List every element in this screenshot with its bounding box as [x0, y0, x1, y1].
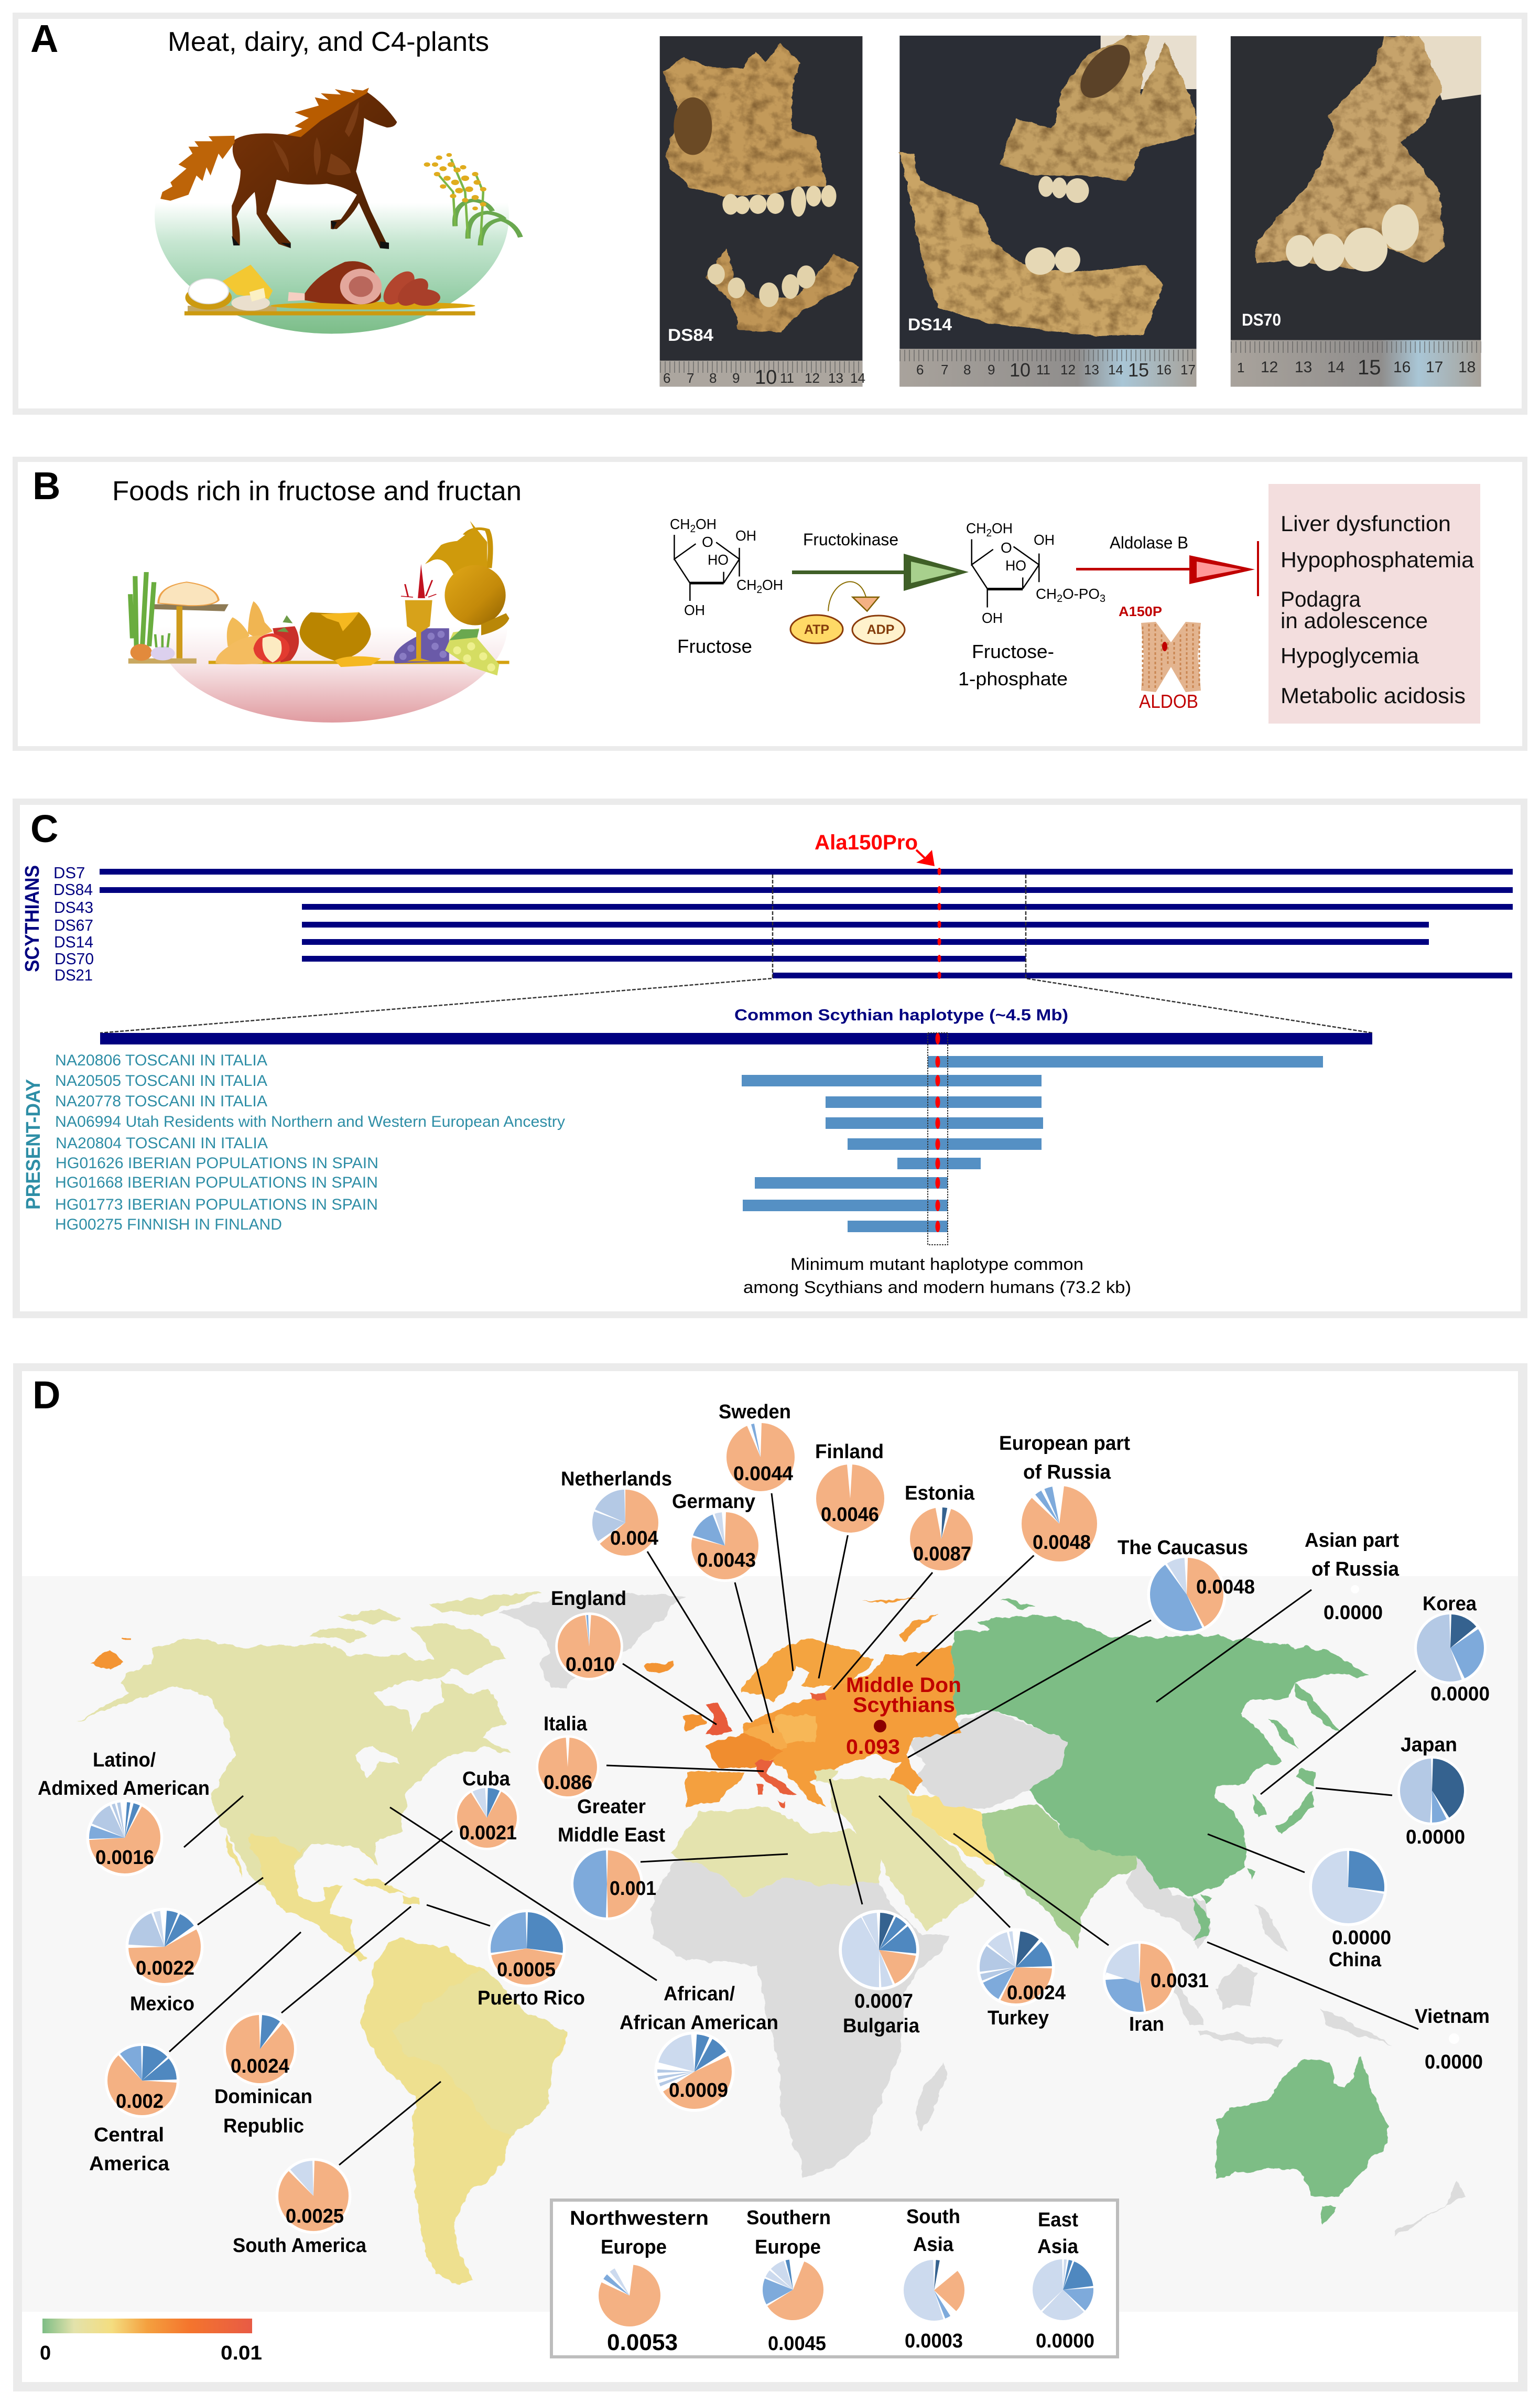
fructokinase arrow with ATP/ADP: Fructokinase — [803, 530, 898, 549]
Scythian sample labels: DS43 — [54, 898, 93, 917]
colour scale: 0 — [40, 2342, 51, 2364]
fructose-1-phosphate structure — [958, 520, 1105, 689]
ruler numbers: 10 — [755, 367, 777, 389]
region: Germany — [774, 1715, 816, 1743]
Scythian sample labels — [53, 864, 94, 984]
pie: Turkey: Turkey — [988, 2007, 1049, 2029]
pie: Mexico: 0.0022 — [136, 1957, 194, 1979]
region: Iran — [906, 1795, 997, 1866]
fructose-1-phosphate structure: CH — [966, 520, 987, 536]
wooden board under dairy — [188, 306, 277, 313]
panel letter C: C — [30, 807, 58, 850]
ruler numbers: 6 — [916, 362, 924, 378]
side label: Scythians: SCYTHIANS — [21, 865, 44, 972]
icon: bread on stand — [155, 582, 229, 659]
fructokinase arrow with ATP/ADP: ATP — [804, 622, 829, 637]
illustration: green bowl with horse and food — [155, 88, 520, 333]
pie: The Caucasus: 0.0048 — [1196, 1576, 1255, 1598]
present-day haplotype bars — [742, 1056, 1323, 1232]
panel C: haplotype chart — [13, 799, 1527, 1318]
region: Iceland — [645, 1661, 675, 1673]
fructose-1-phosphate structure: OH — [982, 610, 1003, 626]
gold shelf line — [209, 661, 509, 664]
region: Alpine Europe — [744, 1721, 787, 1751]
pie: African / African American — [620, 1983, 778, 2112]
pie: China: 0.0000 — [1332, 1927, 1391, 1949]
icon: cheese — [223, 265, 273, 311]
pie: East Asia: 0.0000 — [1036, 2330, 1094, 2352]
fructose-1-phosphate structure: 1-phosphate — [958, 668, 1068, 689]
pie: East Asia: East — [1038, 2209, 1078, 2231]
pie: Vietnam: Vietnam — [1415, 2006, 1490, 2028]
icon: millet plants — [424, 153, 520, 245]
aldolase B blocked arrow: Aldolase B — [1110, 533, 1188, 552]
fructose structure: 2 — [756, 584, 762, 596]
ruler numbers: 15 — [1358, 356, 1381, 379]
ruler numbers: 12 — [805, 370, 820, 386]
present-day sample labels: HG00275 FINNISH IN FINLAND — [55, 1216, 282, 1233]
side label: present-day: PRESENT-DAY — [23, 1079, 45, 1210]
region: Brazil — [393, 1969, 567, 2136]
pie: South America — [233, 2158, 367, 2257]
pie: African / African American: African/ — [664, 1983, 735, 2005]
pie: Greater Middle East — [558, 1796, 665, 1920]
present-day sample labels: NA20804 TOSCANI IN ITALIA — [56, 1135, 268, 1152]
pie: Japan — [1397, 1734, 1467, 1848]
fructose structure: CH — [670, 516, 691, 532]
ruler numbers: 17 — [1180, 362, 1196, 378]
icon: gold jug — [425, 521, 509, 635]
region: Mexico and Central America — [248, 1835, 377, 1961]
pie: African / African American: African American — [620, 2012, 778, 2034]
heading: foods rich in fructose and fructan: Foods rich in fructose and fructan — [112, 476, 522, 507]
heading: meat, dairy, C4 plants: Meat, dairy, and C4-plants — [168, 27, 489, 57]
region: southern USA — [276, 1835, 377, 1866]
ruler numbers: 15 — [1128, 359, 1149, 381]
photos of jaws — [660, 36, 1481, 389]
icon: horse — [160, 88, 397, 249]
ruler numbers: 13 — [828, 370, 843, 386]
Scythian site label: 0.093 — [846, 1736, 900, 1759]
ruler numbers: 16 — [1156, 362, 1172, 378]
fructose-1-phosphate structure: Fructose- — [972, 641, 1054, 662]
pie: Turkey: 0.0024 — [1007, 1982, 1066, 2004]
pie: Korea — [1414, 1593, 1490, 1705]
region: France — [706, 1733, 783, 1768]
photo: DS14 maxilla and mandible — [899, 36, 1197, 386]
photo labels: DS14 — [908, 315, 952, 334]
minimum haplotype caption: Minimum mutant haplotype common — [790, 1255, 1083, 1274]
mutation markers on Scythian bars — [937, 868, 941, 979]
pie: Bulgaria: Bulgaria — [843, 2015, 920, 2037]
region: Arctic islands — [309, 1592, 542, 1674]
icon: pears and apple — [215, 601, 299, 664]
ruler numbers: 12 — [1261, 359, 1278, 376]
region: Novaya Zemlya and Svalbard — [861, 1599, 939, 1643]
pie: Mexico: Mexico — [130, 1993, 194, 2015]
symptoms box — [1268, 484, 1480, 724]
minimum haplotype caption: among Scythians and modern humans (73.2 kb) — [743, 1278, 1131, 1297]
region: Pacific orange landmass — [90, 1637, 129, 1669]
minimum haplotype dotted box — [928, 1033, 948, 1245]
region: North America — [75, 1639, 512, 1888]
aldolase B blocked arrow — [1076, 533, 1259, 596]
fructose-1-phosphate structure: 3 — [1100, 593, 1105, 605]
colour scale: 0.01 — [221, 2342, 262, 2364]
ruler numbers: 9 — [988, 362, 995, 378]
pie: Estonia — [905, 1482, 975, 1573]
region: Ireland — [685, 1713, 706, 1730]
pie: Southern Europe: Southern — [746, 2207, 831, 2229]
Scythian sample labels: DS70 — [55, 950, 94, 968]
icon: grapes — [394, 628, 499, 675]
fructose structure: Fructose — [677, 635, 752, 657]
ruler tick marks — [660, 347, 1481, 367]
region: Greenland — [499, 1594, 687, 1689]
present-day sample labels: NA06994 Utah Residents with Northern and Western European Ancestry — [55, 1113, 565, 1130]
pie: Northwestern Europe — [570, 2207, 709, 2355]
pie: Netherlands: 0.004 — [610, 1527, 658, 1549]
pie: Iran: 0.0031 — [1151, 1970, 1209, 1992]
pie: Greater Middle East: 0.001 — [610, 1878, 656, 1900]
pie: East Asia: Asia — [1037, 2236, 1079, 2258]
fructose structure: OH — [684, 602, 705, 618]
region: Africa — [650, 1854, 952, 2179]
region: China lower — [1029, 1791, 1246, 1898]
region: Bulgaria — [816, 1770, 838, 1783]
photo labels — [668, 310, 1281, 344]
pie: Turkey — [977, 1928, 1066, 2029]
ruler numbers: 13 — [1084, 362, 1099, 378]
pie: Japan: 0.0000 — [1406, 1826, 1465, 1848]
fructose structure: OH — [762, 577, 783, 593]
pie: Netherlands: Netherlands — [561, 1468, 672, 1490]
Scythian sample labels: DS7 — [53, 864, 85, 882]
fructose structure: 2 — [690, 523, 696, 535]
photo: DS70 maxilla — [1231, 36, 1481, 386]
region: South America — [361, 1936, 567, 2285]
fructose structure: OH — [735, 527, 756, 544]
ruler numbers: 11 — [1036, 362, 1050, 378]
dashed zoom guides — [100, 875, 1372, 1033]
ruler numbers: 17 — [1426, 359, 1443, 376]
region: Tasmania — [1320, 2204, 1337, 2224]
fructose structure — [670, 516, 783, 657]
region: Iberia — [686, 1771, 744, 1806]
symptoms box: Podagra — [1281, 587, 1361, 611]
Scythian site label: Scythians — [853, 1694, 955, 1717]
ruler numbers: 14 — [1327, 359, 1344, 376]
pie: African / African American: 0.0009 — [669, 2079, 728, 2102]
pie: South Asia — [905, 2206, 963, 2352]
pie: Bulgaria: 0.0007 — [854, 1990, 913, 2012]
pie: Dominican Republic: Republic — [223, 2115, 304, 2137]
pie: Japan: Japan — [1401, 1734, 1457, 1756]
ruler numbers — [663, 356, 1476, 389]
ruler numbers: 6 — [663, 370, 670, 386]
pie: Central America: Central — [94, 2124, 164, 2146]
panel letter D: D — [32, 1373, 60, 1417]
common haplotype label: Common Scythian haplotype (~4.5 Mb) — [734, 1006, 1068, 1024]
icon: honey pot — [299, 612, 381, 667]
pie: China — [1309, 1848, 1391, 1971]
panel D: world map of allele frequency — [13, 1363, 1527, 2391]
Scythian haplotype bars — [100, 869, 1513, 978]
present-day sample labels: HG01626 IBERIAN POPULATIONS IN SPAIN — [56, 1155, 378, 1172]
ruler numbers: 18 — [1458, 359, 1476, 376]
pie: Korea: 0.0000 — [1430, 1683, 1490, 1705]
present-day sample labels: NA20806 TOSCANI IN ITALIA — [55, 1052, 267, 1069]
mutation markers on present-day bars — [935, 1033, 940, 1232]
pie: Southern Europe — [746, 2207, 831, 2355]
pie: Asian part of Russia: 0.0000 — [1324, 1602, 1383, 1624]
pie: Iran — [1103, 1941, 1209, 2035]
pie: European part of Russia — [999, 1432, 1130, 1565]
ruler numbers: 9 — [732, 370, 740, 386]
region: European Russia and Eastern Europe — [744, 1646, 961, 1805]
icon: goblet with wine — [401, 564, 436, 661]
region: Italy — [754, 1758, 796, 1806]
fructose structure: OH — [696, 516, 717, 532]
pie: Latino / Admixed American — [38, 1749, 210, 1876]
pie: Finland: 0.0046 — [821, 1504, 879, 1526]
A150P label: A150P — [1119, 604, 1162, 619]
arrow: to mutation — [916, 850, 935, 866]
panel letter A: A — [30, 17, 58, 60]
symptoms box: Liver dysfunction — [1281, 511, 1451, 536]
panel B: fructose pathway — [13, 457, 1527, 751]
pie: Finland: Finland — [815, 1441, 884, 1463]
ruler numbers: 14 — [1108, 362, 1123, 378]
ruler numbers: 12 — [1060, 362, 1076, 378]
pie: Italia: Italia — [544, 1713, 588, 1735]
present-day sample labels — [55, 1052, 565, 1233]
Scythian site label — [846, 1674, 961, 1759]
pie: Southern Europe: Europe — [755, 2236, 821, 2258]
ruler numbers: 7 — [941, 362, 948, 378]
minimum haplotype caption — [743, 1255, 1131, 1297]
pie: England: England — [551, 1588, 626, 1610]
pie: Estonia: Estonia — [905, 1482, 975, 1504]
pie: South Asia: 0.0003 — [905, 2330, 963, 2352]
pie: Southern Europe: 0.0045 — [768, 2333, 826, 2355]
pie: England: 0.010 — [566, 1654, 615, 1676]
fructose-1-phosphate structure: HO — [1005, 557, 1026, 574]
icon: bowl of cottage cheese — [185, 278, 232, 309]
Scythian sample labels: DS21 — [55, 966, 93, 984]
region: Scandinavia — [743, 1639, 874, 1701]
ruler numbers: 16 — [1393, 359, 1411, 376]
ruler numbers: 11 — [780, 370, 794, 386]
world map — [75, 1592, 1467, 2285]
symptoms box: in adolescence — [1281, 608, 1428, 633]
pie: Finland — [814, 1441, 887, 1535]
region: Asia north — [952, 1614, 1370, 1888]
pie: China: China — [1329, 1949, 1382, 1971]
symptoms box: Hypoglycemia — [1281, 643, 1419, 668]
panel A: diet and skeletal remains — [13, 13, 1527, 415]
ruler numbers: 1 — [1237, 360, 1244, 375]
pie: Greater Middle East: Middle East — [558, 1824, 665, 1846]
fructose-1-phosphate structure: 2 — [986, 527, 992, 539]
panel letter B: B — [32, 464, 60, 508]
fructokinase arrow with ATP/ADP: ADP — [867, 622, 894, 637]
leader lines — [169, 1493, 1418, 2165]
pie: East Asia — [1036, 2209, 1094, 2352]
pie: Mexico — [125, 1908, 204, 2015]
fructose structure: O — [702, 534, 713, 550]
pie: Asian part of Russia — [1305, 1529, 1400, 1624]
icon: ham and slices on plate — [270, 261, 475, 309]
photo: DS84 maxilla and mandible — [660, 36, 862, 386]
ruler numbers: 13 — [1295, 359, 1312, 376]
sea: Great Lakes — [356, 1744, 399, 1780]
ALDOB label: ALDOB — [1139, 691, 1198, 712]
present-day sample labels: HG01668 IBERIAN POPULATIONS IN SPAIN — [55, 1174, 378, 1191]
pie: The Caucasus — [1118, 1537, 1255, 1634]
pie: South Asia: Asia — [913, 2234, 954, 2256]
pie: Latino / Admixed American: Admixed American — [38, 1777, 210, 1799]
Scythian site label: Middle Don — [846, 1674, 961, 1697]
pie: Vietnam — [1415, 2006, 1490, 2073]
pie: Latino / Admixed American: 0.0016 — [95, 1847, 154, 1869]
pie: Cuba — [454, 1768, 519, 1850]
Ala150Pro label: Ala150Pro — [815, 831, 918, 854]
region: Central Asia — [906, 1711, 1067, 1808]
photo labels: DS70 — [1242, 310, 1281, 329]
region: Estonia — [809, 1693, 826, 1699]
region: Turkey, Arabia and Middle East — [829, 1777, 984, 1931]
pie: Central America: 0.002 — [116, 2090, 164, 2113]
region: Caribbean islands — [353, 1878, 420, 1904]
pie: Puerto Rico: Puerto Rico — [478, 1987, 585, 2009]
pie: The Caucasus: The Caucasus — [1118, 1537, 1248, 1559]
region: Madagascar — [914, 2062, 947, 2131]
pie: Dominican Republic: 0.0024 — [231, 2055, 289, 2077]
region: Baja California — [225, 1837, 243, 1877]
fructokinase arrow with ATP/ADP — [790, 530, 969, 644]
fructose-1-phosphate structure: OH — [1034, 532, 1055, 548]
pie: Puerto Rico: 0.0005 — [497, 1959, 556, 1981]
fructose-1-phosphate structure: CH — [1036, 586, 1057, 602]
fructose-1-phosphate structure: O-PO — [1062, 586, 1100, 602]
pie: Northwestern Europe: Northwestern — [570, 2207, 709, 2229]
pie: Sweden — [719, 1401, 797, 1494]
pie: Korea: Korea — [1423, 1593, 1477, 1615]
region: Great Britain — [706, 1701, 732, 1736]
pie: European part of Russia: 0.0048 — [1033, 1532, 1091, 1554]
pie: Bulgaria — [839, 1910, 920, 2037]
pie: Germany: 0.0043 — [697, 1549, 756, 1571]
photo labels: DS84 — [668, 326, 713, 344]
pie: Estonia: 0.0087 — [913, 1543, 971, 1565]
pie: Dominican Republic — [214, 2012, 312, 2137]
pie: Latino / Admixed American: Latino/ — [93, 1749, 156, 1771]
region: North Africa — [670, 1806, 881, 1898]
pie: Central America — [89, 2043, 179, 2175]
fructose-1-phosphate structure: O — [1001, 540, 1012, 556]
fructose structure: CH — [736, 577, 757, 593]
legend box: regional frequencies — [551, 2200, 1118, 2357]
present-day sample labels: HG01773 IBERIAN POPULATIONS IN SPAIN — [55, 1196, 378, 1213]
pie: Puerto Rico — [478, 1909, 585, 2009]
pie: Netherlands — [561, 1468, 672, 1558]
pie: South Asia: South — [906, 2206, 960, 2228]
region: Vietnam, Hainan, Taiwan — [1191, 1868, 1255, 1943]
pie: Vietnam: 0.0000 — [1425, 2051, 1483, 2073]
ruler numbers: 10 — [1010, 359, 1031, 381]
pie: Sweden: Sweden — [719, 1401, 791, 1423]
pie: European part of Russia: European part — [999, 1432, 1130, 1454]
fructose structure: HO — [708, 552, 729, 568]
colour scale — [40, 2319, 262, 2364]
pie: Dominican Republic: Dominican — [214, 2086, 312, 2108]
pie: Asian part of Russia: Asian part — [1305, 1529, 1399, 1551]
pie: Cuba: Cuba — [462, 1768, 511, 1790]
icon: shelf and green onions — [128, 572, 197, 664]
pie: Cuba: 0.0021 — [459, 1822, 517, 1844]
region: Southeast Asia and islands — [1126, 1850, 1392, 2046]
pie: Asian part of Russia: of Russia — [1311, 1558, 1400, 1580]
Scythian sample labels: DS14 — [54, 933, 93, 951]
pie: Northwestern Europe: Europe — [601, 2236, 667, 2258]
Scythian sample labels: DS67 — [54, 916, 93, 934]
pie: Italia — [536, 1713, 599, 1798]
pie: England — [551, 1588, 626, 1680]
fructose-1-phosphate structure: OH — [992, 520, 1013, 536]
pie: South America: South America — [233, 2235, 367, 2257]
present-day sample labels: NA20778 TOSCANI IN ITALIA — [55, 1093, 267, 1110]
common haplotype bar — [100, 1033, 1372, 1044]
present-day sample labels: NA20505 TOSCANI IN ITALIA — [55, 1072, 267, 1090]
pie: Italia: 0.086 — [544, 1772, 592, 1794]
pie: European part of Russia: of Russia — [1023, 1461, 1111, 1483]
ruler numbers: 14 — [850, 370, 865, 386]
pie: Sweden: 0.0044 — [733, 1463, 793, 1485]
icon: ALDOB protein structure — [1141, 622, 1201, 692]
pie: Germany: Germany — [672, 1491, 755, 1513]
pie: Greater Middle East: Greater — [577, 1796, 646, 1818]
pie: Germany — [672, 1491, 761, 1582]
region: Kamchatka, Sakhalin, Japan, Korea — [1000, 1599, 1339, 1835]
pie: Northwestern Europe: 0.0053 — [607, 2330, 678, 2355]
symptoms box: Hypophosphatemia — [1281, 547, 1474, 572]
Scythian sample labels: DS84 — [53, 880, 93, 899]
pie: Iran: Iran — [1129, 2013, 1164, 2035]
region: New Zealand — [1395, 2181, 1467, 2238]
illustration: pink bowl with fruits — [128, 521, 509, 723]
ruler numbers: 8 — [709, 370, 717, 386]
ruler numbers: 7 — [687, 370, 694, 386]
pie: South America: 0.0025 — [286, 2205, 344, 2227]
symptoms box: Metabolic acidosis — [1281, 683, 1466, 708]
ruler numbers: 8 — [963, 362, 971, 378]
icon: gold table — [185, 311, 475, 315]
region: South Asia — [981, 1803, 1140, 1949]
fructose-1-phosphate structure: 2 — [1057, 593, 1062, 605]
region: Australia — [1214, 2056, 1389, 2199]
pie: Central America: America — [89, 2153, 170, 2175]
